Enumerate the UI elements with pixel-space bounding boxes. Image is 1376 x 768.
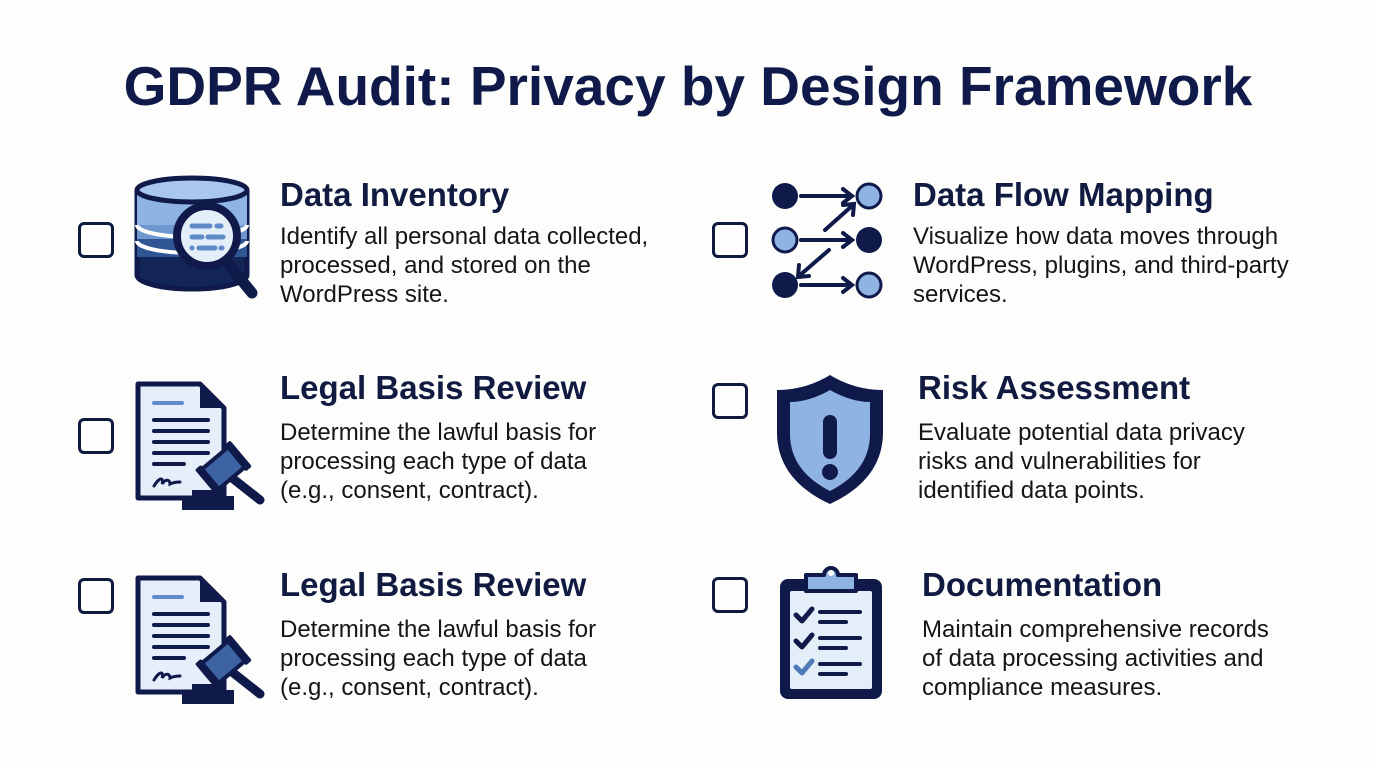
checkbox: legal basis review 2 bbox=[78, 578, 114, 614]
text: legal basis review 2: Legal Basis Review bbox=[280, 566, 586, 603]
text: legal basis review 1: (e.g., consent, contract). bbox=[280, 477, 539, 504]
text: risk assessment: Risk Assessment bbox=[918, 369, 1190, 406]
text: data inventory: Data Inventory bbox=[280, 176, 509, 213]
text: risk assessment: risks and vulnerabilities for bbox=[918, 448, 1201, 475]
text: documentation: of data processing activities and bbox=[922, 645, 1264, 672]
text: data flow mapping: Visualize how data moves through bbox=[913, 223, 1278, 250]
title: GDPR Audit: Privacy by Design Framework bbox=[124, 55, 1252, 117]
text: legal basis review 1: processing each type of data bbox=[280, 448, 587, 475]
checkbox: documentation bbox=[712, 577, 748, 613]
text: data flow mapping: Data Flow Mapping bbox=[913, 176, 1214, 213]
text: legal basis review 2: processing each type of data bbox=[280, 645, 587, 672]
text: risk assessment: identified data points. bbox=[918, 477, 1145, 504]
text: legal basis review 2 bbox=[280, 566, 596, 701]
text: documentation bbox=[922, 566, 1269, 701]
text: documentation: compliance measures. bbox=[922, 674, 1162, 701]
text: legal basis review 2: Determine the lawful basis for bbox=[280, 616, 596, 643]
text: data inventory: WordPress site. bbox=[280, 281, 449, 308]
checkbox: risk assessment bbox=[712, 383, 748, 419]
icon: clipboard checklist bbox=[780, 566, 882, 699]
icon: document with gavel 2 bbox=[136, 576, 264, 704]
checkbox: data inventory bbox=[78, 222, 114, 258]
text: data flow mapping: services. bbox=[913, 281, 1008, 308]
text: documentation: Maintain comprehensive records bbox=[922, 616, 1269, 643]
icon: database with magnifier bbox=[134, 176, 258, 298]
icon: data flow bbox=[772, 182, 882, 298]
text: data inventory: processed, and stored on the bbox=[280, 252, 591, 279]
text: documentation: Documentation bbox=[922, 566, 1162, 603]
text: legal basis review 2: (e.g., consent, contract). bbox=[280, 674, 539, 701]
text: risk assessment bbox=[918, 369, 1245, 504]
text: data flow mapping: WordPress, plugins, and third-party bbox=[913, 252, 1289, 279]
checkbox: legal basis review 1 bbox=[78, 418, 114, 454]
icon: shield with exclamation bbox=[777, 375, 883, 504]
checkbox: data flow mapping bbox=[712, 222, 748, 258]
text: risk assessment: Evaluate potential data privacy bbox=[918, 419, 1245, 446]
text: data inventory bbox=[280, 176, 648, 308]
text: data inventory: Identify all personal data collected, bbox=[280, 223, 648, 250]
icon: document with gavel bbox=[136, 382, 264, 510]
text: legal basis review 1: Determine the lawful basis for bbox=[280, 419, 596, 446]
text: data flow mapping bbox=[913, 176, 1289, 308]
text: legal basis review 1: Legal Basis Review bbox=[280, 369, 586, 406]
text: legal basis review 1 bbox=[280, 369, 596, 504]
